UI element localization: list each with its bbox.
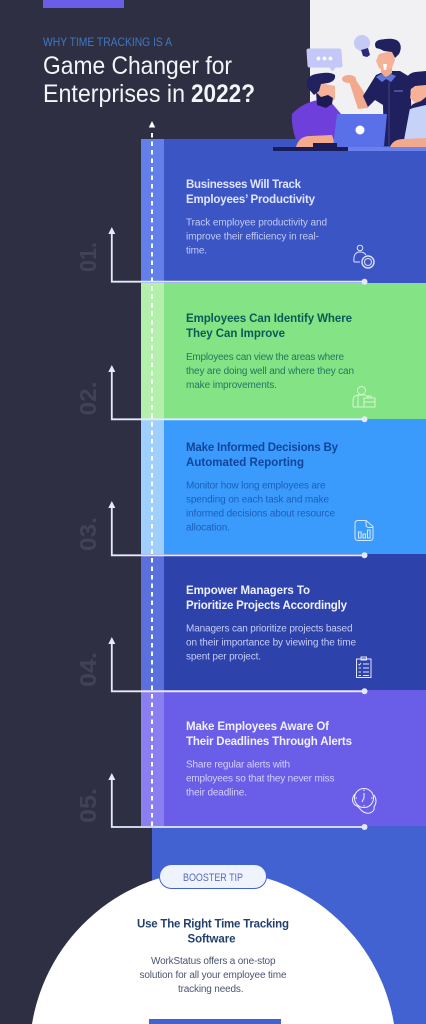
step 2 heading: Employees Can Identify Where — [186, 313, 352, 325]
booster tip pill — [160, 864, 266, 888]
dashed timeline with arrow — [149, 121, 155, 826]
title: 2022? — [191, 80, 255, 108]
step number 01: 01. — [75, 242, 101, 272]
step 3 heading: Automated Reporting — [186, 457, 304, 469]
title: Game Changer for — [43, 52, 232, 80]
step 2 text: they are doing well and where they can — [186, 366, 354, 377]
step 2 text: make improvements. — [186, 380, 277, 391]
panel: lower blue background — [152, 826, 426, 1024]
title: Enterprises in — [43, 80, 185, 108]
booster tip text: WorkStatus offers a one-stop — [151, 956, 276, 967]
step 1 text: time. — [186, 246, 207, 256]
step 5 text — [186, 760, 334, 798]
seated bearded man — [292, 73, 341, 147]
step 1 text: Track employee productivity and — [186, 218, 327, 228]
step 3 text: Monitor how long employees are — [186, 480, 326, 492]
step 1 heading: Businesses Will Track — [186, 179, 302, 191]
step 4 text: on their importance by viewing the time — [186, 638, 356, 648]
booster tip heading: Software — [188, 934, 236, 946]
booster tip text — [140, 956, 287, 995]
icon: light bulb — [354, 35, 370, 57]
icon: clipboard checklist — [356, 657, 371, 678]
booster tip heading: Use The Right Time Tracking — [137, 918, 289, 930]
step 4 heading: Empower Managers To — [186, 585, 310, 597]
booster tip pill: BOOSTER TIP — [183, 872, 243, 884]
step 2 heading — [186, 313, 352, 340]
booster tip text: tracking needs. — [178, 984, 244, 995]
woman — [390, 71, 426, 147]
step 4 text: Managers can prioritize projects based — [186, 624, 352, 634]
step 5 text: their deadline. — [186, 788, 247, 798]
icon: person with briefcase — [353, 386, 375, 407]
step 4 text: spent per project. — [186, 652, 261, 662]
illustration backdrop — [310, 0, 426, 140]
step 3 text: informed decisions about resource — [186, 508, 335, 520]
bottom accent bar — [149, 1019, 281, 1024]
desk edge — [273, 147, 426, 151]
step 3 heading — [186, 442, 339, 469]
step 5 heading — [186, 721, 352, 748]
top accent bar — [43, 0, 124, 8]
connector 4 — [108, 637, 368, 694]
booster tip white circle — [32, 870, 394, 1024]
step 4 heading — [186, 585, 348, 612]
step 3 text: spending on each task and make — [186, 494, 329, 506]
step 5 heading: Their Deadlines Through Alerts — [186, 736, 352, 748]
step 4 text — [186, 624, 356, 662]
connector 3 — [108, 501, 368, 558]
panel 4 background — [141, 554, 426, 690]
icon: alert clock — [352, 788, 376, 813]
illustration: team around a laptop — [273, 35, 426, 151]
connector 5 — [108, 773, 368, 830]
icon: report document — [355, 520, 373, 540]
step 1 text: improve their efficiency in real- — [186, 232, 319, 242]
step number 02: 02. — [75, 382, 101, 416]
step 5 text: Share regular alerts with — [186, 760, 290, 770]
panel 3 background — [141, 419, 426, 554]
booster tip text: solution for all your employee time — [140, 970, 287, 981]
connector 2 — [108, 365, 368, 422]
title — [43, 52, 255, 108]
eyebrow heading: WHY TIME TRACKING IS A — [43, 35, 172, 49]
laptop — [313, 114, 387, 148]
step 2 text — [186, 352, 354, 391]
step 1 heading: Employees’ Productivity — [186, 194, 316, 206]
step 2 heading: They Can Improve — [186, 328, 285, 340]
step number 04: 04. — [75, 652, 101, 687]
step 2 text: Employees can view the areas where — [186, 352, 344, 363]
step 4 heading: Prioritize Projects Accordingly — [186, 600, 348, 612]
panel 2 background — [141, 283, 426, 419]
step 5 heading: Make Employees Aware Of — [186, 721, 329, 733]
step 3 text: allocation. — [186, 522, 230, 534]
step number 05: 05. — [75, 788, 101, 823]
booster tip heading — [137, 918, 289, 946]
step 1 text — [186, 218, 327, 256]
step 3 text — [186, 480, 335, 534]
panel 1 background — [141, 139, 426, 283]
icon: speech bubble — [306, 48, 342, 72]
connector 1 — [108, 227, 368, 285]
step 5 text: employees so that they never miss — [186, 774, 334, 784]
step number 03: 03. — [75, 517, 101, 551]
standing man — [342, 39, 413, 146]
icon: person with clock — [354, 245, 374, 268]
panel 5 background — [141, 690, 426, 826]
step 3 heading: Make Informed Decisions By — [186, 442, 339, 454]
step 1 heading — [186, 179, 316, 206]
